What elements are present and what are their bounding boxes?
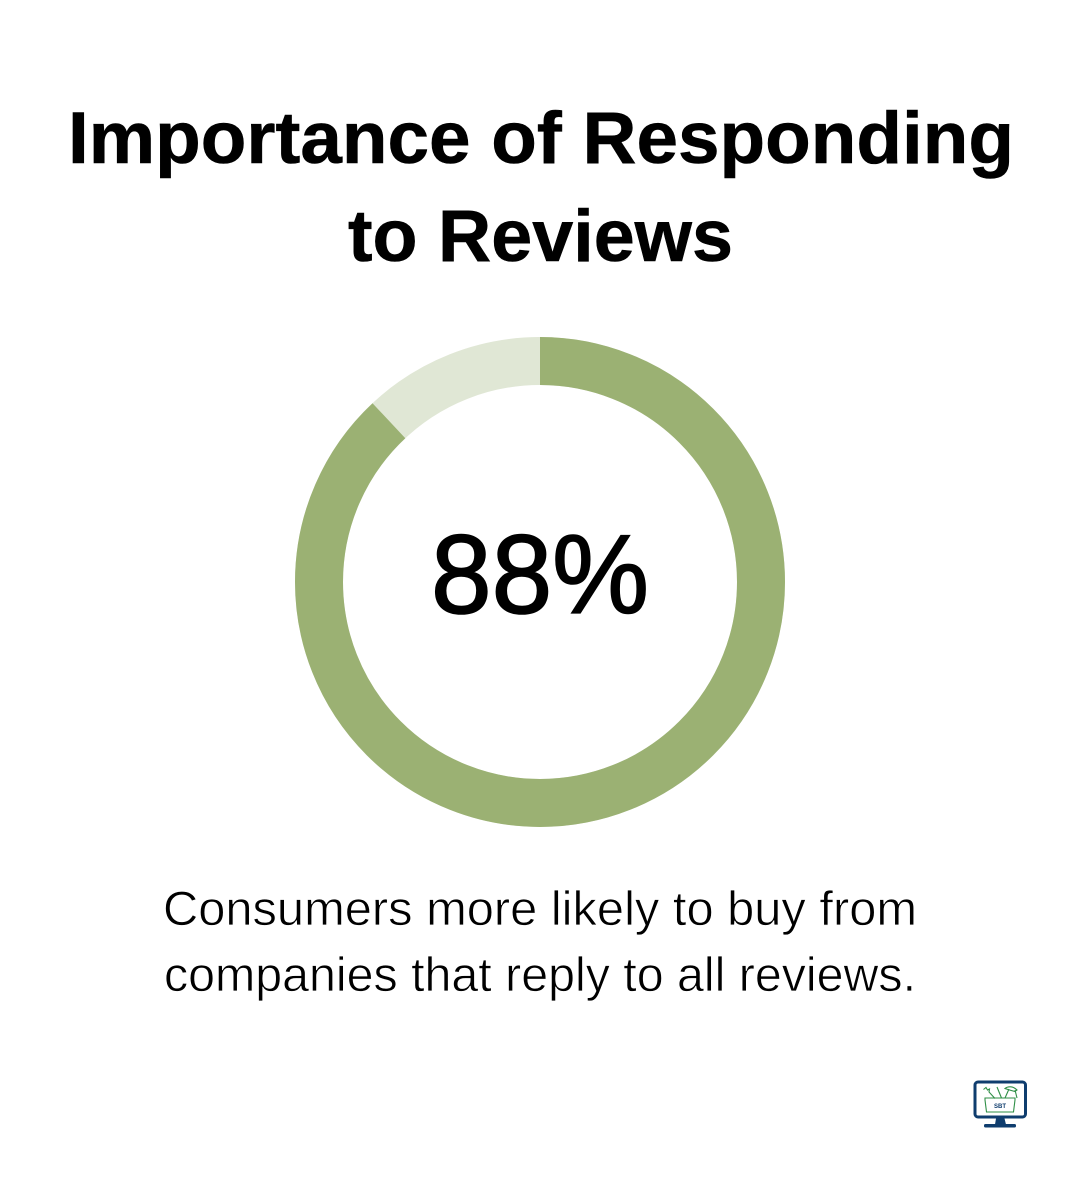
description text (163, 883, 917, 1002)
percentage value: 88% (431, 512, 649, 637)
title (68, 98, 1014, 277)
title: Importance of Responding (68, 98, 1014, 179)
icon: toolbox with tools (984, 1087, 1017, 1112)
description text: Consumers more likely to buy from (163, 883, 917, 936)
title: to Reviews (348, 196, 733, 277)
donut chart: 88% (319, 361, 761, 803)
logo text: SBT (994, 1104, 1006, 1110)
icon: SBT monitor logo (975, 1082, 1026, 1128)
description text: companies that reply to all reviews. (164, 949, 916, 1002)
